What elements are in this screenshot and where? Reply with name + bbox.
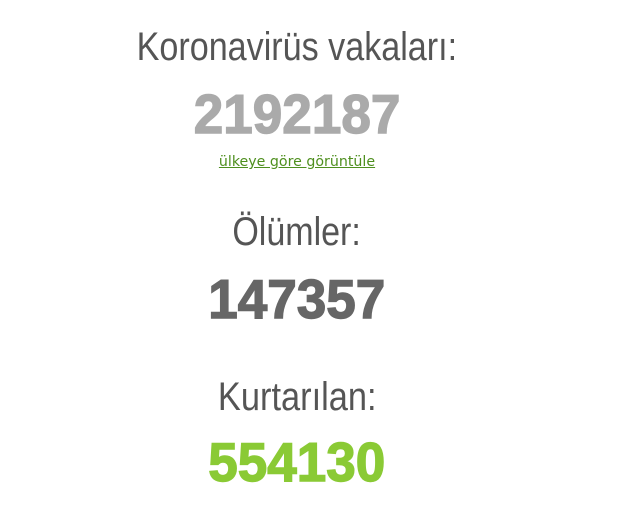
heading: cases: Koronavirüs vakaları: <box>137 25 457 69</box>
heading: recovered: Kurtarılan: <box>218 375 376 419</box>
number: recovered: 554130 <box>208 431 386 493</box>
heading: deaths: Ölümler: <box>233 210 361 254</box>
link: view by country: ülkeye göre görüntüle <box>219 154 375 170</box>
number: deaths: 147357 <box>208 268 386 330</box>
number: cases: 2192187 <box>194 83 400 145</box>
